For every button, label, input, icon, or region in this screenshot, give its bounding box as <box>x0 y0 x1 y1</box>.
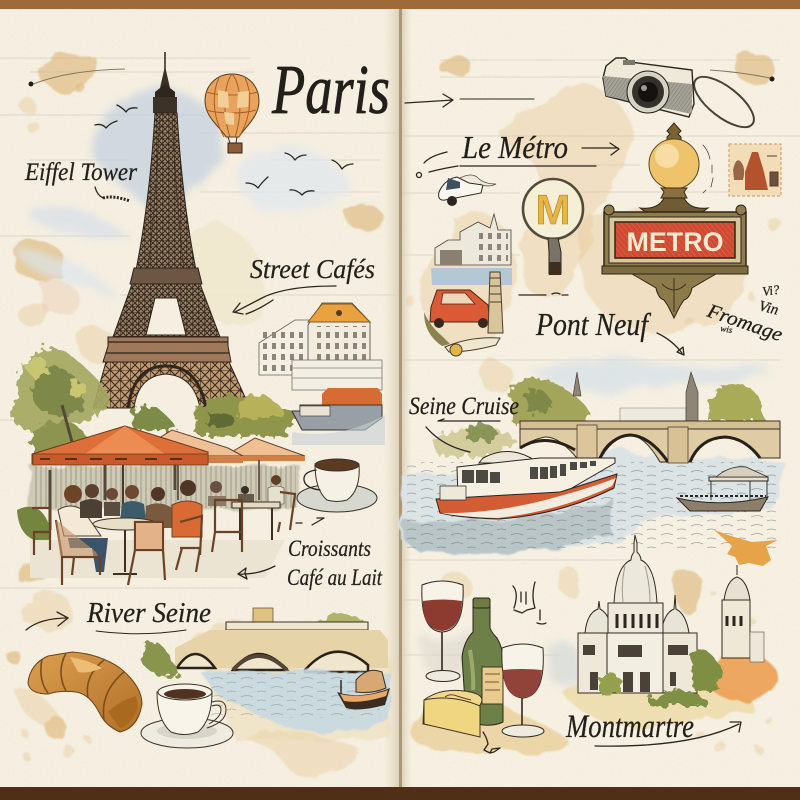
roof dome <box>479 452 534 463</box>
notes: Vin and Fromage: Fromage <box>703 300 785 346</box>
illustration: wine and cheese <box>410 581 570 753</box>
icon: small sketched car <box>439 175 496 206</box>
sky watercolor wash <box>20 89 347 298</box>
coffee stains left page <box>5 53 384 778</box>
label: Le Metro: Le Métro <box>461 129 568 165</box>
hull <box>436 474 617 519</box>
wash <box>560 677 751 727</box>
arrow: Le Metro right <box>582 143 619 155</box>
cabin <box>457 458 615 498</box>
icon: small river boat right <box>677 467 768 511</box>
second platform <box>130 268 202 284</box>
illustration: upper river landscape with bridge <box>402 359 785 552</box>
ground <box>30 540 285 578</box>
distant sky <box>530 359 770 391</box>
umbrella middle <box>130 430 243 500</box>
illustration: Sacre-Coeur Montmartre <box>550 535 779 727</box>
lower bar <box>602 266 748 274</box>
frame <box>604 212 746 268</box>
drum <box>608 603 663 633</box>
umbrella right <box>225 438 305 500</box>
spire <box>164 52 166 88</box>
arrow: coffee pointer <box>296 518 324 525</box>
wine glass right <box>502 644 544 737</box>
icon: camera with strap <box>603 58 762 136</box>
icon: small boat lower <box>337 670 390 709</box>
icon: Metro M roundel: M <box>536 186 570 233</box>
cheese <box>423 690 482 737</box>
icon: Eiffel Tower <box>93 52 250 408</box>
label: Eiffel Tower: Eiffel Tower <box>24 159 137 186</box>
far buildings <box>573 372 698 422</box>
icon: Seine cruise boat <box>436 452 617 519</box>
arrow: top of right page <box>405 94 534 107</box>
middle section <box>113 284 220 337</box>
lamp globe <box>649 139 699 189</box>
orange paint splat <box>714 530 778 566</box>
icon: Metro sign with lamp: METRO <box>626 227 724 257</box>
dash line Pont Neuf <box>519 293 568 295</box>
notes: Vin and Fromage: Vin <box>757 298 780 319</box>
ink dot line top left <box>28 69 125 86</box>
bushes <box>600 648 722 706</box>
underline: Le Metro swoosh <box>416 152 596 178</box>
finial <box>667 123 681 141</box>
body <box>578 633 697 693</box>
icon: coffee cup lower <box>141 684 233 748</box>
notes: Vin and Fromage <box>703 282 785 346</box>
wine bottle <box>462 598 503 725</box>
birds flock <box>95 105 353 195</box>
icon: Metro M roundel <box>523 179 583 275</box>
illustration: lower stone bridge and river <box>140 608 390 740</box>
top scrollwork <box>640 198 708 214</box>
wash under <box>410 700 570 753</box>
tower right <box>722 565 764 662</box>
arrow: Montmartre pointer <box>595 722 741 746</box>
illustration: trees middle <box>132 395 294 436</box>
illustration: cafe building <box>259 303 382 390</box>
lower legs and arch <box>93 362 250 408</box>
chairs <box>32 492 295 585</box>
notes: Vin and Fromage: Vi? <box>761 282 781 299</box>
icon: hot air balloon <box>205 74 259 153</box>
backdrop trees and trunks <box>17 405 300 542</box>
illustration: cafe terrace <box>17 405 305 585</box>
upper shaft <box>136 113 196 270</box>
arrow: Pont Neuf pointer <box>657 333 684 355</box>
lower ornament <box>632 274 716 318</box>
wine glass left <box>422 581 463 682</box>
stone bridge <box>520 423 780 462</box>
main dome <box>614 535 657 603</box>
label: Cafe au Lait: Café au Lait <box>287 565 383 590</box>
label: Street Cafes: Street Cafés <box>250 254 375 284</box>
first platform <box>103 337 231 362</box>
label: Montmartre: Montmartre <box>565 709 694 745</box>
red panel with text <box>615 222 735 258</box>
illustration: orange roofs and quay boat <box>292 388 385 445</box>
book gutter <box>399 9 402 787</box>
icon: croissant <box>28 652 142 732</box>
label: River Seine: River Seine <box>86 598 211 629</box>
side domes <box>585 601 612 633</box>
icon: vintage postage stamp <box>729 144 781 196</box>
panel: right journal page <box>402 9 800 787</box>
icon: Metro sign with lamp <box>602 123 748 318</box>
ink dot line top right <box>710 70 774 82</box>
windows <box>462 461 596 483</box>
top cabin <box>153 97 177 113</box>
coffee stains right page <box>406 51 782 754</box>
arrow: Street Cafes <box>233 286 336 314</box>
label: Pont Neuf: Pont Neuf <box>535 306 652 342</box>
title: Paris: Paris <box>271 52 390 129</box>
illustration: riverside buildings <box>431 214 512 285</box>
illustration: red car and chimney <box>424 272 503 356</box>
panel: left journal page <box>0 9 399 787</box>
people group <box>58 475 284 572</box>
squiggle arrow <box>483 732 500 753</box>
label: Croissants: Croissants <box>288 536 371 561</box>
umbrella large <box>32 426 208 530</box>
top linen edge <box>0 0 800 10</box>
illustration: tree behind tower left <box>12 348 109 432</box>
icon: coffee cup and saucer upper <box>297 459 377 512</box>
music note doodle <box>513 582 546 624</box>
arrow: Seine Cruise pointer <box>426 419 500 452</box>
trees <box>432 378 764 456</box>
river <box>402 452 785 552</box>
dashed lamp rays <box>703 145 713 193</box>
label: Seine Cruise: Seine Cruise <box>409 393 519 420</box>
tables <box>93 502 280 574</box>
arrow: Croissants pointer <box>238 566 275 579</box>
arrow: River Seine pointer <box>26 612 186 634</box>
bottom cover edge <box>0 787 800 800</box>
notes: Vin and Fromage: wis <box>720 323 734 335</box>
arrow: Eiffel Tower doodle <box>95 187 130 201</box>
